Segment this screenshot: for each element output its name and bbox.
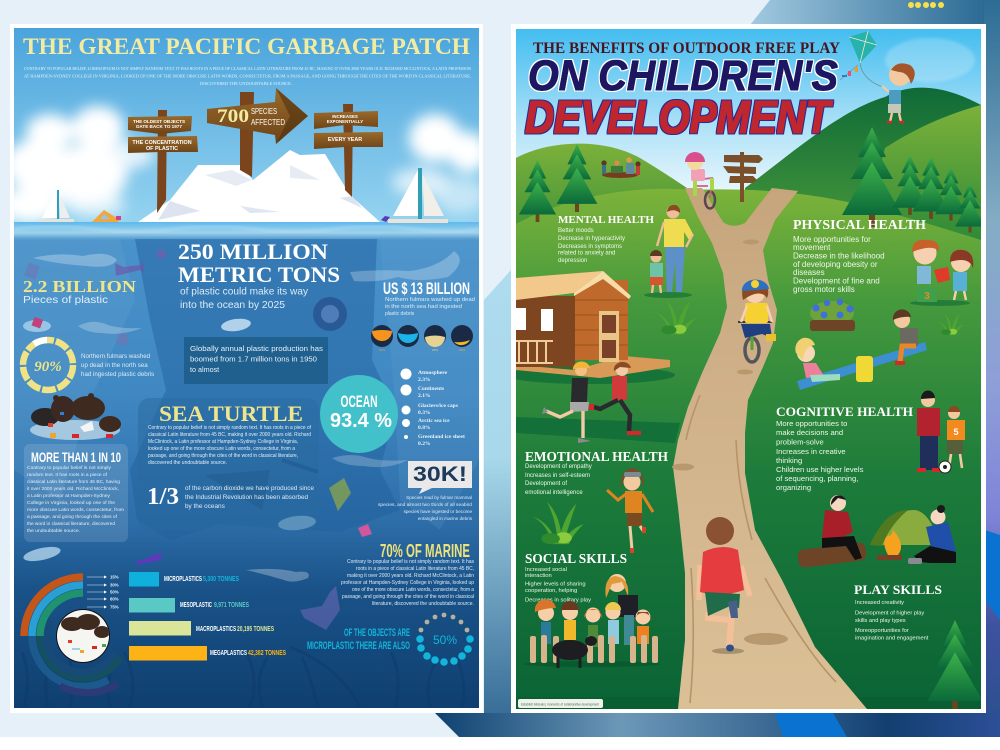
stat: 70% of marine: roots in a piece of classical Latin literature from 45 BC,	[356, 566, 474, 572]
stat: us $13 billion: in the north sea had ingested	[385, 304, 462, 310]
headline: 250 million metric tons: of plastic could make its way	[180, 286, 308, 298]
section: cognitive health: COGNITIVE HEALTH	[776, 404, 913, 419]
intro text: DISCOVERED THE UNDOUBTABLE SOURCE.	[200, 81, 292, 86]
section: cognitive health: Increases in creative	[776, 447, 846, 456]
section: play skills	[854, 582, 942, 642]
dot ring: 50%	[416, 613, 474, 666]
text: northern fulmars: up dead in the north sea	[81, 362, 148, 369]
man and boy with ball: 5	[953, 427, 959, 437]
section: emotional health: Increases in self-esteem	[525, 473, 590, 479]
section: social skills: SOCIAL SKILLS	[525, 551, 627, 566]
panel: sea turtle: 1/3	[147, 484, 179, 510]
arrow sign: 700 species affected: SPECIES	[251, 107, 277, 116]
right signpost: EXPONENTIALLY	[327, 119, 363, 124]
bar chart: plastic tonnes: MESOPLASTIC	[180, 600, 212, 609]
donut: 90%	[23, 340, 73, 390]
section: physical health: More opportunities for	[793, 235, 871, 244]
legend: water distribution: Arctic sea ice	[418, 418, 450, 424]
text: microplastic objects: OF THE OBJECTS ARE	[344, 627, 410, 639]
flowers on log	[810, 299, 855, 331]
bar chart: plastic tonnes: MACROPLASTICS	[196, 624, 236, 633]
panel: sea turtle	[138, 398, 319, 531]
fill level circles	[371, 325, 473, 352]
bar chart: plastic tonnes: 5,300 TONNES	[203, 574, 239, 583]
left signpost: THE OLDEST OBJECTS	[133, 119, 185, 124]
seesaw children	[795, 309, 927, 390]
stat: 2.2 billion	[23, 277, 137, 306]
section: play skills: Moreopportunities for	[855, 628, 909, 634]
callout: more than 1 in 10: the word in classical literature, discovered	[27, 521, 115, 527]
fill level circles: 15%	[459, 348, 465, 352]
hills	[745, 88, 981, 202]
panel: sea turtle: the Industrial Revolution has been absorbed	[185, 494, 308, 501]
intro text	[24, 66, 471, 86]
title: development: DEVELOPMENT	[525, 91, 833, 143]
road	[673, 188, 867, 709]
panel: outdoor free play	[505, 24, 986, 713]
bar chart: plastic tonnes: 9,971 TONNES	[214, 600, 249, 609]
boy running away	[699, 517, 750, 654]
stat: 70% of marine: literature, discovered the undoubtable source.	[372, 601, 474, 607]
credit label: Establish Mutuals | moments of collaborative development	[521, 702, 599, 706]
speech bubble: 30K: species have ingested or become	[404, 509, 472, 514]
grass tuft	[532, 502, 584, 544]
section: social skills: cooperation, helping	[525, 588, 577, 594]
stat: us $13 billion: Northern fulmars washed up dead	[385, 297, 475, 303]
speech bubble: 30K: entangled in marine debris	[418, 516, 473, 521]
legend: water distribution: Glaciers/ice caps	[418, 403, 459, 409]
callout: more than 1 in 10: more obscure Latin words, consectetur, from	[27, 507, 124, 513]
callout: more than 1 in 10: classical Latin literature from 45 BC, having	[27, 479, 120, 485]
callout: more than 1 in 10: a passage, and going through the cites of	[27, 514, 118, 520]
panel: sea turtle: McClintock, a Latin professor at Hampden-Sydney College in Virginia,	[148, 439, 298, 445]
stat: 70% of marine: professor at Hampden-Sydney College in Virginia, looked up	[341, 580, 474, 586]
text: microplastic objects: MICROPLASTIC THERE ARE ALSO	[307, 640, 410, 652]
section: cognitive health: make decisions and	[776, 428, 843, 437]
left signpost: THE CONCENTRATION	[132, 140, 192, 146]
donut: 90%: 90%	[34, 359, 62, 375]
bar chart: plastic tonnes: 20,195 TONNES	[237, 624, 274, 633]
decorative yellow dots	[908, 2, 944, 8]
runners	[542, 362, 641, 443]
title: THE GREAT PACIFIC GARBAGE PATCH	[23, 34, 470, 59]
section: cognitive health: of sequencing, planning,	[776, 474, 858, 483]
legend: water distribution: 2.3%	[418, 377, 431, 383]
section: emotional health: Development of	[525, 481, 567, 487]
child on green bike	[738, 280, 776, 362]
intro text: CONTRARY TO POPULAR BELIEF, LOREM IPSUM IS NOT SIMPLY RANDOM TEXT. IT HAS ROOTS IN A PIECE OF CLASSICAL LATIN LITERATURE FROM 45 BC, MAKING IT OVER 2000 YEARS OLD. RICHARD MCCLINTOCK, A LATIN PROFESSOR	[24, 66, 471, 72]
radial chart: 30%	[110, 582, 119, 588]
stat: 70% of marine: passage, and going through the cites of the word in classical	[342, 594, 474, 600]
callout: more than 1 in 10: random text. It has roots in a piece of	[27, 472, 108, 478]
speech bubble: 30K	[378, 461, 473, 521]
bar chart: plastic tonnes: MEGAPLASTICS	[210, 648, 247, 657]
kid with kite	[882, 63, 915, 122]
man and boy with ball	[917, 390, 965, 473]
section: emotional health: Development of empathy	[525, 464, 592, 470]
left signpost: DATE BACK TO 1977	[136, 124, 182, 129]
icon: garbage pile	[30, 393, 121, 440]
panel: sea turtle: by the oceans	[185, 503, 225, 510]
legend: water distribution: Atmosphere	[418, 370, 448, 376]
headline: 250 million metric tons: METRIC TONS	[178, 262, 340, 287]
text: northern fulmars: Northern fulmars washed	[81, 353, 151, 360]
headline: 250 million metric tons: into the ocean by 2025	[180, 300, 286, 311]
children at fence with sheep	[524, 574, 660, 668]
sailboat right	[381, 168, 448, 223]
picnic group	[601, 157, 641, 178]
section: play skills: imagination and engagement	[855, 636, 929, 642]
dot ring: 50%: 50%	[433, 633, 457, 647]
title: on children's: ON CHILDREN'S	[528, 52, 838, 100]
clouds	[0, 106, 488, 223]
credit label	[518, 699, 603, 708]
grass tuft	[937, 313, 963, 335]
fill level circles: 50%	[379, 348, 385, 352]
section: mental health: Decreases in symptoms	[558, 244, 622, 250]
section: social skills	[525, 551, 627, 604]
speech bubble: 30K: Species read by fulmar mammal	[406, 495, 472, 500]
section: social skills: interaction	[525, 573, 552, 579]
bar chart: plastic tonnes: MICROPLASTICS	[164, 574, 202, 583]
signpost	[723, 152, 763, 202]
children with gift: 3	[924, 291, 930, 302]
right signpost	[314, 104, 383, 197]
stat: 70% of marine: Contrary to popular belief is not simply random text. It has	[347, 559, 474, 565]
child on pink bike	[685, 152, 715, 208]
panel: sea turtle: passage, and going through the cites of the word in classical literature,	[148, 453, 298, 459]
callout: annual plastic production: boomed from 1.7 million tons in 1950	[190, 354, 317, 364]
floating plastic debris	[22, 249, 460, 630]
campers around fire	[797, 495, 956, 568]
panel: sea turtle: discovered the undoubtable source.	[148, 460, 227, 466]
section: mental health: Better moods	[558, 228, 594, 234]
arrow sign: 700 species affected	[207, 88, 308, 177]
callout: more than 1 in 10: it over 2000 years old. Richard McClintock,	[27, 486, 119, 492]
callout: more than 1 in 10	[24, 444, 128, 542]
submerged iceberg silhouette	[14, 239, 479, 540]
bar chart: plastic tonnes	[129, 572, 286, 660]
panel: sea turtle: of the carbon dioxide we have produced since	[185, 485, 314, 492]
headline: 250 million metric tons: 250 MILLION	[178, 239, 328, 264]
legend: water distribution: 0.2%	[418, 441, 431, 447]
left signpost: OF PLASTIC	[146, 146, 178, 152]
headline: 250 million metric tons	[178, 239, 340, 311]
seaweed	[21, 646, 460, 664]
section: cognitive health: organizing	[776, 483, 811, 492]
callout: annual plastic production: Globally annual plastic production has	[190, 344, 323, 353]
legend: water distribution: 0.8%	[418, 425, 431, 431]
left signpost	[128, 110, 198, 213]
section: cognitive health: problem-solve	[776, 438, 824, 446]
section: play skills: PLAY SKILLS	[854, 582, 942, 597]
section: cognitive health: thinking	[776, 456, 802, 465]
arrow sign: 700 species affected: AFFECTED	[251, 118, 285, 127]
stat: 2.2 billion: 2.2 BILLION	[23, 277, 137, 296]
stat: 2.2 billion: Pieces of plastic	[23, 295, 108, 306]
section: social skills: Increased social	[525, 567, 567, 573]
section: social skills: Higher levels of sharing	[525, 582, 586, 588]
cabin	[505, 271, 675, 384]
radial chart: 75%	[110, 604, 119, 610]
callout: more than 1 in 10: the undoubtable source.	[27, 528, 80, 534]
panel: sea turtle: classical Latin literature from 45 BC, making it over 2000 years old. Richard	[148, 432, 311, 438]
trees	[519, 127, 985, 712]
stat: 70% of marine: 70% OF MARINE	[380, 541, 470, 561]
section: physical health: movement	[793, 243, 831, 252]
legend: water distribution	[400, 368, 465, 447]
right signpost: INCREASES	[332, 114, 358, 119]
intro text: AT HAMPDEN-SYDNEY COLLEGE IN VIRGINIA, LOOKED UP ONE OF THE MORE OBSCURE LATIN WORDS, CONSECTETUR, FROM A PASSAGE, AND GOING THROUGH THE CITES OF THE WORD IN CLASSICAL LITERATURE,	[24, 74, 471, 80]
section: mental health: depression	[558, 258, 587, 264]
section: physical health: of developing obesity or	[793, 260, 878, 269]
children with gift	[910, 240, 973, 306]
arrow sign: 700 species affected: 700	[217, 106, 249, 127]
section: physical health	[793, 217, 927, 294]
callout: more than 1 in 10: Contrary to popular belief is not simply	[27, 465, 112, 471]
callout: more than 1 in 10: MORE THAN 1 IN 10	[31, 449, 121, 465]
right signpost: EVERY YEAR	[328, 137, 362, 143]
section: physical health: diseases	[793, 268, 825, 277]
text: northern fulmars: had ingested plastic debris	[81, 371, 154, 378]
sailboat left	[39, 190, 74, 222]
section: physical health: Decrease in the likelihood	[793, 252, 885, 260]
section: play skills: Increased creativity	[855, 600, 904, 606]
section: physical health: gross motor skills	[793, 285, 855, 294]
radial chart	[24, 574, 120, 693]
legend: water distribution: Greenland ice sheet	[418, 434, 465, 440]
text: northern fulmars	[81, 353, 154, 378]
section: social skills: Decreases in solitary play	[525, 598, 591, 604]
callout: annual plastic production	[184, 337, 328, 384]
bar chart: plastic tonnes: 42,382 TONNES	[248, 648, 286, 657]
section: emotional health	[525, 449, 668, 496]
water surface	[14, 222, 479, 240]
fill level circles: 30%	[405, 348, 411, 352]
circle: ocean 93.4%: 93.4 %	[330, 410, 392, 432]
legend: water distribution: 2.1%	[418, 393, 431, 399]
stat: us $13 billion: US $ 13 BILLION	[383, 279, 470, 298]
callout: annual plastic production: to almost	[190, 365, 219, 374]
section: mental health	[558, 214, 654, 264]
radial chart: 50%	[110, 590, 119, 594]
panel: sea turtle: looked up one of the more obscure Latin words, consectetur, from a	[148, 446, 295, 452]
section: mental health: related to anxiety and	[558, 250, 615, 256]
section: mental health: Decrease in hyperactivity	[558, 236, 625, 242]
callout: more than 1 in 10: a Latin professor at Hampden-Sydney	[27, 493, 111, 499]
stat: 70% of marine: making it over 2000 years old. Richard McClintock, a Latin	[347, 573, 474, 579]
radial chart: 60%	[110, 596, 119, 602]
section: mental health: MENTAL HEALTH	[558, 214, 654, 226]
iceberg	[138, 150, 380, 222]
section: emotional health: EMOTIONAL HEALTH	[525, 449, 668, 464]
stat: us $13 billion	[383, 279, 475, 317]
swimmer	[92, 210, 121, 222]
stat: 70% of marine: one of the more obscure Latin words, consectetur, from a	[352, 587, 474, 593]
section: emotional health: emotional intelligence	[525, 490, 583, 496]
circle: ocean 93.4%	[320, 375, 398, 453]
icon: kite	[840, 31, 885, 88]
panel: sea turtle: SEA TURTLE	[159, 401, 303, 426]
section: cognitive health: More opportunities to	[776, 419, 847, 428]
legend: water distribution: 0.3%	[418, 410, 431, 416]
adventure girl	[607, 468, 653, 553]
section: cognitive health	[776, 404, 913, 492]
mother and child	[644, 205, 693, 298]
section: cognitive health: Children use higher levels	[776, 465, 864, 474]
section: play skills: skills and play types	[855, 618, 906, 624]
grass tuft	[654, 300, 696, 334]
radial chart: 15%	[110, 574, 119, 580]
section: physical health: Development of fine and	[793, 276, 880, 286]
stat: us $13 billion: plastic debris	[385, 311, 415, 317]
speech bubble: 30K: species, and almost two thirds of all seabird	[378, 502, 472, 507]
panel: great pacific garbage patch	[0, 24, 488, 713]
fill level circles: 25%	[432, 348, 438, 352]
panel: sea turtle: Contrary to popular belief is not simply random text. It has roots in a piece of	[148, 425, 312, 431]
text: microplastic objects	[307, 627, 410, 652]
section: physical health: PHYSICAL HEALTH	[793, 217, 927, 232]
circle: ocean 93.4%: OCEAN	[340, 392, 378, 411]
section: play skills: Development of higher play	[855, 610, 924, 616]
stat: 70% of marine	[341, 541, 474, 607]
grass ground	[516, 189, 981, 709]
speech bubble: 30K: 30K!	[413, 463, 467, 486]
callout: more than 1 in 10: College in Virginia, looked up one of the	[27, 500, 115, 506]
title: THE BENEFITS OF OUTDOOR FREE PLAY	[533, 40, 840, 57]
legend: water distribution: Continents	[418, 386, 445, 392]
